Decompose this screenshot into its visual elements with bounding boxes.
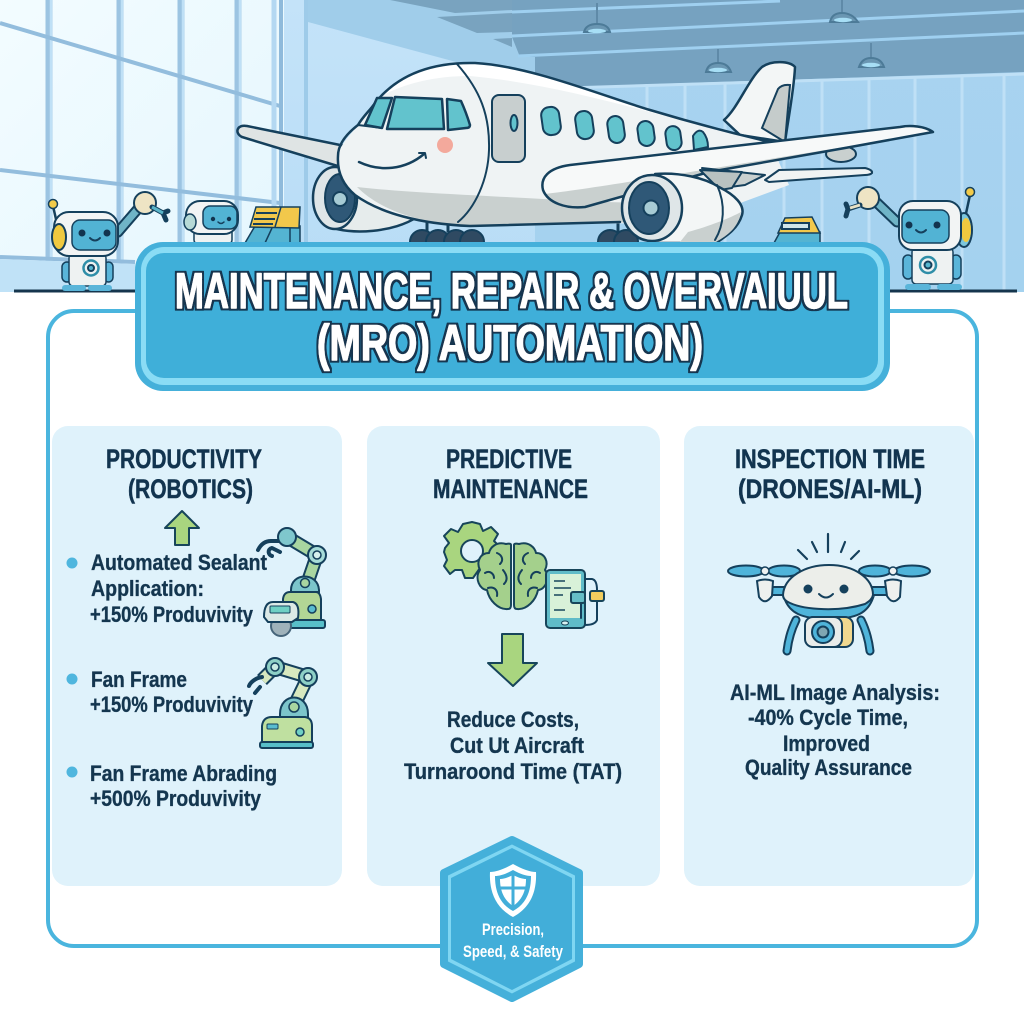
robot: left mascot — [48, 192, 168, 291]
body — [903, 248, 962, 290]
motor arms — [757, 580, 901, 601]
bullet: sealant: Application: — [91, 576, 204, 601]
panel: predictive maintenance — [367, 426, 660, 886]
body text — [730, 680, 940, 780]
left landing gear — [410, 220, 484, 254]
fuselage — [338, 63, 789, 226]
heading: MAINTENANCE — [433, 474, 588, 504]
antenna — [48, 200, 58, 228]
face — [804, 584, 848, 598]
body text: -40% Cycle Time, — [748, 705, 908, 730]
airplane — [237, 62, 933, 254]
bullet: sealant — [66, 550, 268, 627]
badge text: Speed, & Safety — [463, 942, 563, 961]
icon: robot arm — [249, 658, 317, 748]
ceiling lights — [584, 0, 884, 72]
right engine — [622, 174, 743, 243]
panel: inspection time — [684, 426, 974, 886]
arm — [872, 198, 897, 222]
robot: small rear — [184, 201, 238, 244]
heading: PREDICTIVE — [446, 444, 572, 474]
white lower background — [0, 293, 1024, 1024]
icon: robot arm with sealant tool — [258, 528, 326, 636]
right landing gear — [598, 220, 638, 254]
main wing — [542, 126, 933, 207]
icon: drone — [728, 534, 930, 651]
head — [899, 201, 972, 250]
gripper — [134, 192, 168, 220]
body text: Improved — [783, 731, 870, 756]
bullet: fan frame — [66, 667, 254, 717]
panel: productivity robotics — [52, 426, 342, 886]
icon: shield — [490, 864, 536, 917]
yellow service stand, left — [245, 207, 300, 243]
head — [52, 212, 118, 256]
body — [783, 565, 873, 619]
hexagon badge — [444, 840, 579, 998]
body text: Reduce Costs, — [447, 707, 579, 732]
body text: Cut Ut Aircraft — [450, 733, 585, 758]
horizontal stabilizer — [765, 146, 872, 182]
title text: (MRO) AUTOMATION) — [317, 315, 703, 371]
heading — [106, 444, 262, 504]
bullet: sealant: +150% Produvivity — [90, 602, 254, 627]
left engine — [313, 167, 417, 232]
body text — [404, 707, 622, 784]
icon: gear — [444, 522, 505, 578]
cabin door — [492, 95, 525, 162]
heading: INSPECTION TIME — [735, 444, 925, 474]
bullet: fan frame: Fan Frame — [91, 667, 187, 692]
badge text: Precision, — [482, 920, 544, 939]
body text: Turnaroond Time (TAT) — [404, 759, 622, 784]
title banner — [135, 242, 890, 391]
heading: (ROBOTICS) — [128, 474, 253, 504]
cabin windows — [540, 106, 708, 151]
robot: right mascot — [846, 187, 974, 290]
antenna — [965, 188, 974, 218]
icon: tablet — [546, 570, 604, 628]
bullet: abrading: +500% Produvivity — [90, 786, 262, 811]
bullet: fan frame: +150% Produvivity — [90, 692, 254, 717]
heading: (DRONES/AI-ML) — [738, 474, 922, 504]
heading — [735, 444, 925, 504]
floor line — [14, 290, 1017, 292]
legs — [787, 620, 870, 651]
tail fin — [724, 62, 795, 142]
smile and blush — [359, 137, 453, 168]
heading: PRODUCTIVITY — [106, 444, 262, 474]
hangar background — [0, 0, 1024, 292]
rotors — [728, 566, 930, 576]
bullet: sealant: Automated Sealant — [91, 550, 268, 575]
body — [62, 254, 113, 291]
bullet: abrading: Fan Frame Abrading — [90, 761, 277, 786]
title text — [175, 263, 848, 371]
bullet: abrading — [66, 761, 277, 811]
camera — [805, 617, 853, 647]
gripper — [846, 187, 879, 216]
icon: down arrow — [488, 634, 537, 686]
icon: up arrow — [165, 511, 199, 545]
arm — [118, 203, 143, 232]
cockpit windows — [365, 97, 470, 130]
signal rays — [798, 534, 859, 559]
main content frame — [48, 311, 977, 946]
yellow service stand, right — [774, 217, 820, 243]
body text: Quality Assurance — [745, 755, 912, 780]
icon: brain — [478, 543, 547, 609]
body text: AI-ML Image Analysis: — [730, 680, 940, 705]
heading — [433, 444, 588, 504]
badge text — [463, 920, 563, 961]
left wing — [237, 126, 345, 167]
